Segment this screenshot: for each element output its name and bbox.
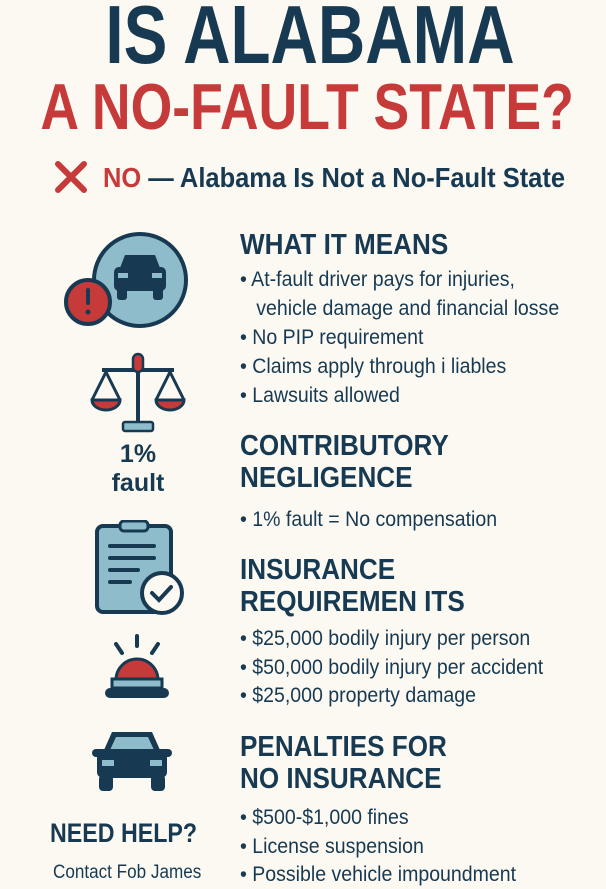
label: 1% fault: 1% [120, 440, 156, 468]
bullet: • 1% fault = No compensation [240, 508, 497, 531]
icon: clipboard with check [95, 520, 184, 615]
icon: red X [55, 161, 87, 193]
bullets: • $25,000 bodily injury per person [240, 627, 530, 650]
bullets: • $500-$1,000 fines [240, 806, 409, 829]
title line 2: A NO-FAULT STATE? [40, 70, 574, 143]
need help heading: NEED HELP? [50, 818, 197, 848]
panel: insurance requirements [240, 554, 544, 707]
panel: what it means [240, 229, 559, 407]
bullets: vehicle damage and financial losse [256, 297, 559, 320]
bullets: • Possible vehicle impoundment [240, 863, 516, 886]
icon: car with alert [64, 232, 188, 328]
heading: NO INSURANCE [240, 763, 442, 795]
bullets: • Lawsuits allowed [240, 384, 400, 407]
bullets: • $25,000 property damage [240, 684, 476, 707]
bullets [240, 627, 544, 707]
icon: siren [105, 634, 169, 698]
heading: CONTRIBUTORY [240, 430, 449, 462]
icon: scales [90, 352, 186, 432]
heading [240, 731, 447, 795]
icon: car [92, 732, 172, 791]
label: 1% fault: fault [112, 469, 164, 497]
heading [240, 430, 449, 494]
bullets: • No PIP requirement [240, 326, 423, 349]
heading: NEGLIGENCE [240, 462, 413, 494]
bullets: • $50,000 bodily injury per accident [240, 656, 543, 678]
subtitle text: NO — Alabama Is Not a No-Fault State [103, 162, 565, 193]
heading: REQUIREMEN ITS [240, 586, 465, 618]
heading: PENALTIES FOR [240, 731, 447, 763]
bullets [240, 268, 559, 407]
label: 1% fault [112, 440, 164, 497]
heading [240, 554, 465, 618]
bullets: • At-fault driver pays for injuries, [240, 268, 515, 291]
heading: INSURANCE [240, 554, 395, 586]
bullets [240, 806, 516, 886]
heading: WHAT IT MEANS [240, 229, 448, 261]
panel: contributory negligence [240, 430, 497, 531]
panel: penalties [240, 731, 516, 886]
bullets: • License suspension [240, 834, 424, 858]
subtitle [55, 161, 565, 193]
title [40, 0, 574, 143]
bullets: • Claims apply through i liables [240, 355, 506, 378]
contact text: Contact Fob James [53, 862, 201, 883]
